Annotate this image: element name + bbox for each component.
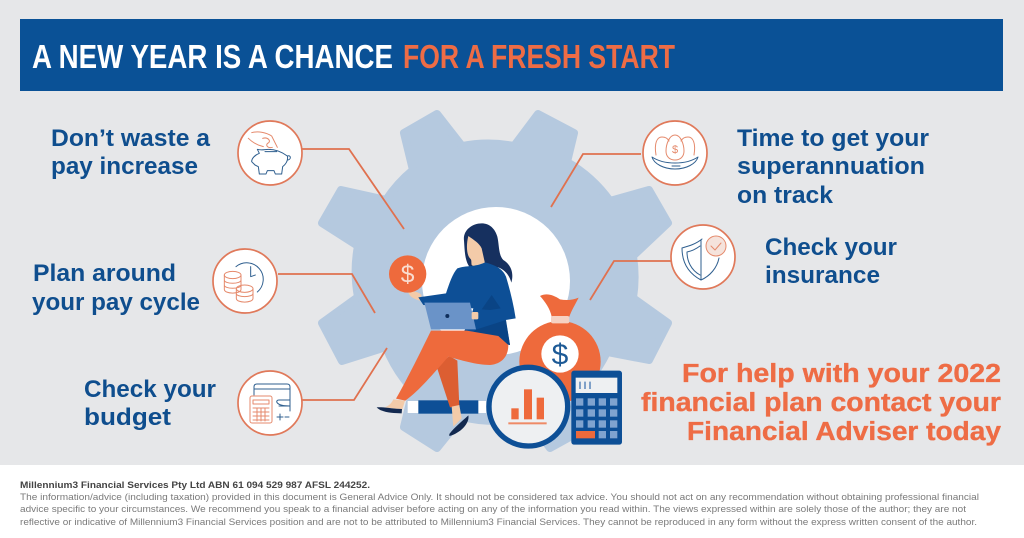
call to action: financial plan contact your	[641, 389, 1001, 417]
footer disclaimer: The information/advice (including taxation) provided in this document is General Advice Only. It should not be considered tax advice. You should not act on any recommendation without obtaining professional financial	[20, 492, 979, 502]
footer disclaimer: advice specific to your circumstances. We recommend you speak to a financial adviser before acting on any of the information you read within. The views expressed within are solely those of the author; they are not	[20, 504, 966, 514]
call to action: Financial Adviser today	[687, 418, 1002, 446]
magnifier with bar chart	[489, 367, 568, 446]
face	[467, 236, 485, 267]
hair	[464, 223, 512, 283]
label: pay cycle	[32, 260, 200, 316]
label: budget	[84, 376, 216, 431]
icon: nest eggs	[643, 121, 707, 185]
label: pay increase: Don’t waste a	[51, 125, 211, 152]
title banner: FOR A FRESH START	[403, 38, 675, 75]
label: insurance	[765, 234, 897, 289]
illustration: woman, money bag, magnifier and calculator	[377, 223, 622, 446]
label: pay cycle: your pay cycle	[32, 289, 200, 316]
money bag: $	[552, 339, 569, 372]
pen bar	[408, 400, 486, 414]
connector: pay increase	[302, 149, 404, 229]
dollar coin	[389, 255, 426, 293]
label: superannuation: superannuation	[737, 153, 925, 180]
connector: budget	[302, 348, 387, 400]
icon: wallet and calculator	[238, 371, 302, 435]
woman	[377, 223, 516, 436]
gear illustration background	[322, 114, 668, 448]
footer disclaimer	[0, 465, 1024, 538]
label: pay cycle: Plan around	[33, 260, 176, 287]
label: pay increase	[51, 125, 211, 180]
connector: pay cycle	[278, 274, 375, 313]
laptop	[424, 303, 476, 329]
call to action: For help with your 2022	[682, 360, 1001, 388]
icon: piggy bank	[238, 121, 302, 185]
icon: nest eggs: $	[672, 144, 678, 156]
icon: coins and clock	[213, 249, 277, 313]
icon: shield with check	[671, 225, 735, 289]
sweater	[418, 262, 516, 345]
connector: insurance	[590, 261, 671, 300]
label: pay increase: pay increase	[51, 153, 198, 180]
title banner	[20, 19, 1003, 91]
dollar coin: $	[401, 262, 415, 289]
label: insurance: insurance	[765, 262, 880, 289]
label: superannuation	[737, 125, 929, 209]
label: budget: budget	[84, 404, 171, 431]
footer disclaimer: reflective or indicative of Millennium3 Financial Services position and are not to be attributed to Millennium3 Financial Services. They cannot be reproduced in any form without the express written consent of the author.	[20, 517, 977, 527]
footer disclaimer: Millennium3 Financial Services Pty Ltd ABN 61 094 529 987 AFSL 244252.	[20, 480, 370, 490]
label: insurance: Check your	[765, 234, 897, 261]
call to action	[641, 360, 1002, 446]
money bag	[519, 294, 601, 402]
calculator	[571, 371, 622, 445]
title banner: A NEW YEAR IS A CHANCE	[32, 38, 393, 75]
connector: superannuation	[551, 154, 641, 207]
label: superannuation: Time to get your	[737, 125, 929, 152]
label: budget: Check your	[84, 376, 216, 403]
label: superannuation: on track	[737, 182, 834, 209]
